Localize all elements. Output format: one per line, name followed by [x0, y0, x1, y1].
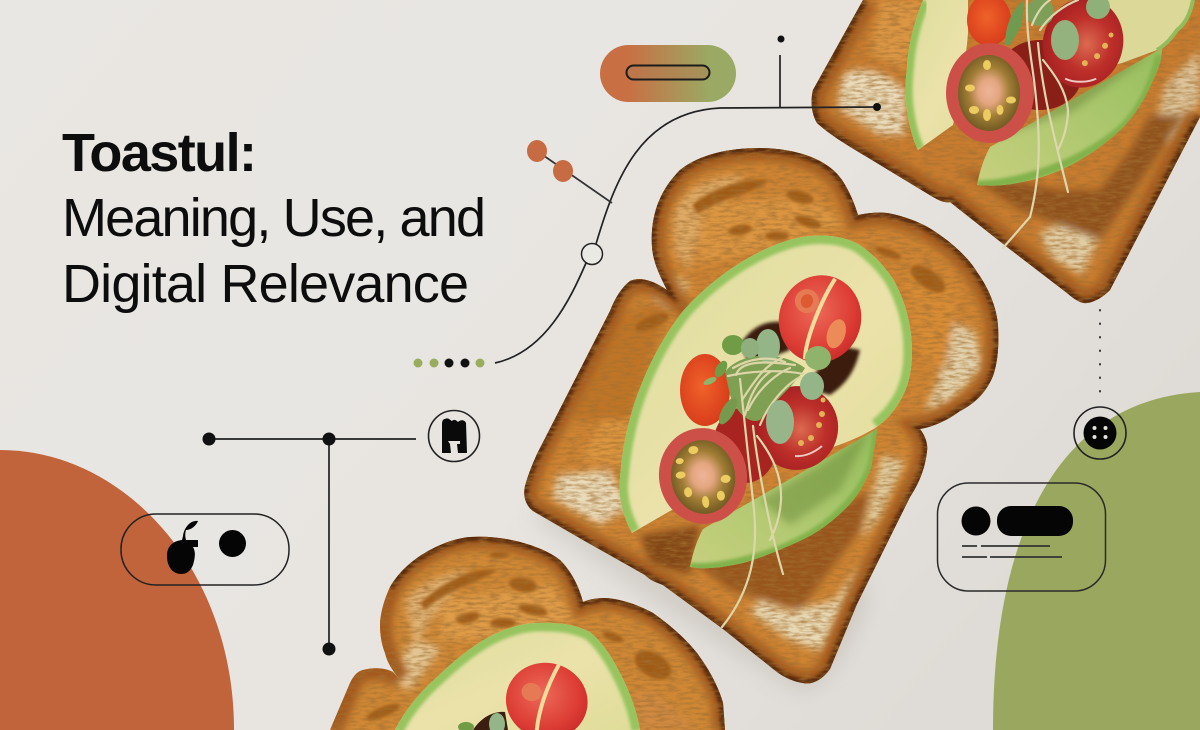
tomato: cut halved: [946, 43, 1034, 143]
microgreens: leaves behind: [702, 329, 780, 427]
icon: apple: [167, 521, 198, 574]
tomato behind center: [998, 40, 1082, 110]
T-shaped connector: [202, 432, 416, 656]
title line 1: Toastul:: [62, 123, 257, 183]
avocado pit shadow: [740, 322, 860, 395]
terracotta node branch: [527, 140, 612, 203]
avocado: lower slice: [977, 49, 1162, 186]
tomato: orange: [967, 0, 1011, 46]
toast: top right slice: [800, 0, 1200, 310]
tomato: right half: [744, 375, 850, 481]
top connector end dots: [778, 36, 881, 111]
microgreens: dense centre: [725, 356, 805, 421]
bread tonal areas: [552, 176, 983, 652]
avocado: upper slice: [610, 230, 920, 540]
pill with apple and dot icons: [121, 514, 289, 585]
bread crust edge: [812, 0, 1200, 303]
sprouts: leaves: [1005, 0, 1110, 60]
toast: center main slice: [520, 140, 1010, 692]
toast: bottom slice: [330, 530, 730, 730]
avocado: lower slice: [685, 425, 880, 573]
avocado: left slice: [906, 0, 968, 150]
tomato: cut halved: [653, 422, 753, 530]
title line 3: Digital Relevance: [62, 254, 469, 314]
gradient pill badge: [600, 45, 736, 102]
tomato: top half: [767, 264, 873, 374]
title line 2: Meaning, Use, and: [62, 188, 486, 248]
shape: terracotta quarter circle: [0, 450, 234, 730]
card pill: [997, 506, 1073, 536]
info card outline with icons: [938, 483, 1106, 591]
dotted vertical line: [1099, 310, 1101, 395]
shape: olive green quarter circle: [993, 392, 1200, 730]
microgreens: leaves front: [766, 346, 831, 444]
icon: circled button: [1074, 407, 1126, 459]
connector curve with nodes: [495, 55, 877, 363]
icon: dot: [219, 530, 246, 557]
tomato: hidden center red: [713, 407, 777, 483]
microgreens: stems: [722, 358, 803, 627]
card circle: [962, 506, 990, 536]
bread pale crumb areas: [838, 0, 1200, 275]
tomato: right half: [1033, 0, 1133, 97]
icon: circled building: [428, 410, 480, 462]
card text lines: [962, 546, 1062, 557]
dot row: [414, 358, 484, 368]
tomato: bottom slice: [498, 654, 596, 730]
tomato: orange behind: [680, 354, 730, 426]
avocado: bottom slice: [390, 620, 645, 730]
microgreens: bottom slice: [458, 712, 508, 730]
bread crust edge: [524, 148, 998, 683]
sprouts: top toast: [1003, 0, 1078, 248]
title text: [62, 123, 486, 314]
bread air holes: [633, 180, 950, 334]
avocado: upper right slice: [1095, 0, 1193, 70]
